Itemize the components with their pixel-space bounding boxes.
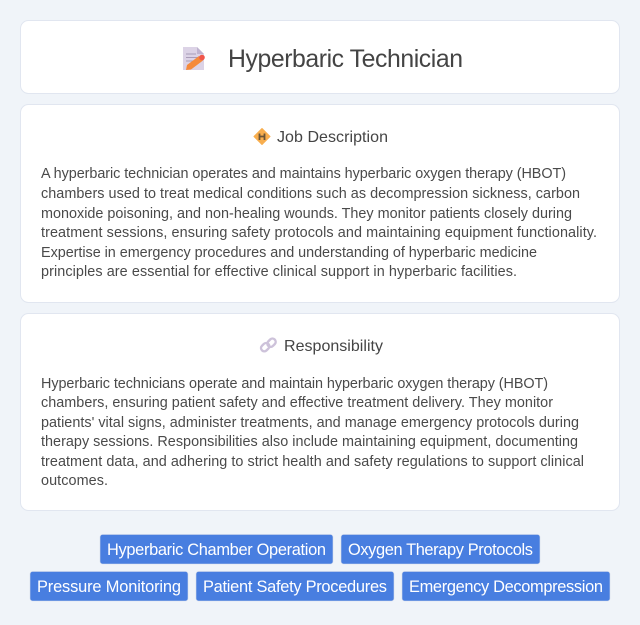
text block: responsibility: chambers, ensuring patient safety and effective treatment delivery. They monitor [41, 395, 553, 411]
tag: emergency decompression [402, 572, 610, 601]
tag: hyperbaric chamber operation: Hyperbaric Chamber Operation [107, 541, 326, 559]
text block: job description: A hyperbaric technician operates and maintains hyperbaric oxygen therapy (HBOT) [41, 166, 566, 182]
tag: patient safety procedures: Patient Safety Procedures [203, 578, 387, 596]
text block: job description: treatment sessions, ensuring safety protocols and maintaining equipment functionality. [41, 225, 597, 241]
text block: responsibility: treatment data, and adhering to strict health and safety regulations to support clinical [41, 454, 584, 470]
heading: responsibility: Responsibility [284, 338, 383, 355]
text block: responsibility: Hyperbaric technicians operate and maintain hyperbaric oxygen therapy (HBOT) [41, 376, 548, 392]
tag: oxygen therapy protocols [341, 534, 540, 564]
text block: responsibility: patients' vital signs, administer treatments, and manage emergency protocols during [41, 415, 579, 431]
panel: title [20, 20, 620, 94]
tag: pressure monitoring: Pressure Monitoring [37, 578, 181, 596]
tags [30, 534, 610, 601]
icon: document with pencil [183, 47, 205, 70]
tag: emergency decompression: Emergency Decompression [409, 578, 603, 596]
tag: pressure monitoring [30, 572, 188, 601]
panel: job description [20, 104, 620, 302]
text block: job description [41, 166, 597, 280]
tag: oxygen therapy protocols: Oxygen Therapy Protocols [348, 541, 533, 559]
tag: hyperbaric chamber operation [100, 534, 333, 564]
heading: title: Hyperbaric Technician [228, 46, 463, 73]
text block: responsibility: outcomes. [41, 473, 108, 489]
icon: link [260, 337, 277, 353]
text block: responsibility: therapy sessions. Responsibilities also include maintaining equipment, documenting [41, 434, 578, 450]
text block: job description: chambers used to treat medical conditions such as decompression sickness, carbon [41, 186, 580, 202]
text block: job description: monoxide poisoning, and non-healing wounds. They monitor patients closely during [41, 206, 572, 222]
tag: patient safety procedures [196, 572, 394, 601]
icon: construction diamond [254, 128, 270, 144]
heading: job description: Job Description [277, 129, 388, 146]
text block: responsibility [41, 376, 584, 489]
text block: job description: Expertise in emergency procedures and understanding of hyperbaric medicine [41, 245, 537, 261]
text block: job description: principles are essential for effective clinical support in hyperbaric facilities. [41, 264, 517, 280]
panel: responsibility [20, 314, 620, 510]
